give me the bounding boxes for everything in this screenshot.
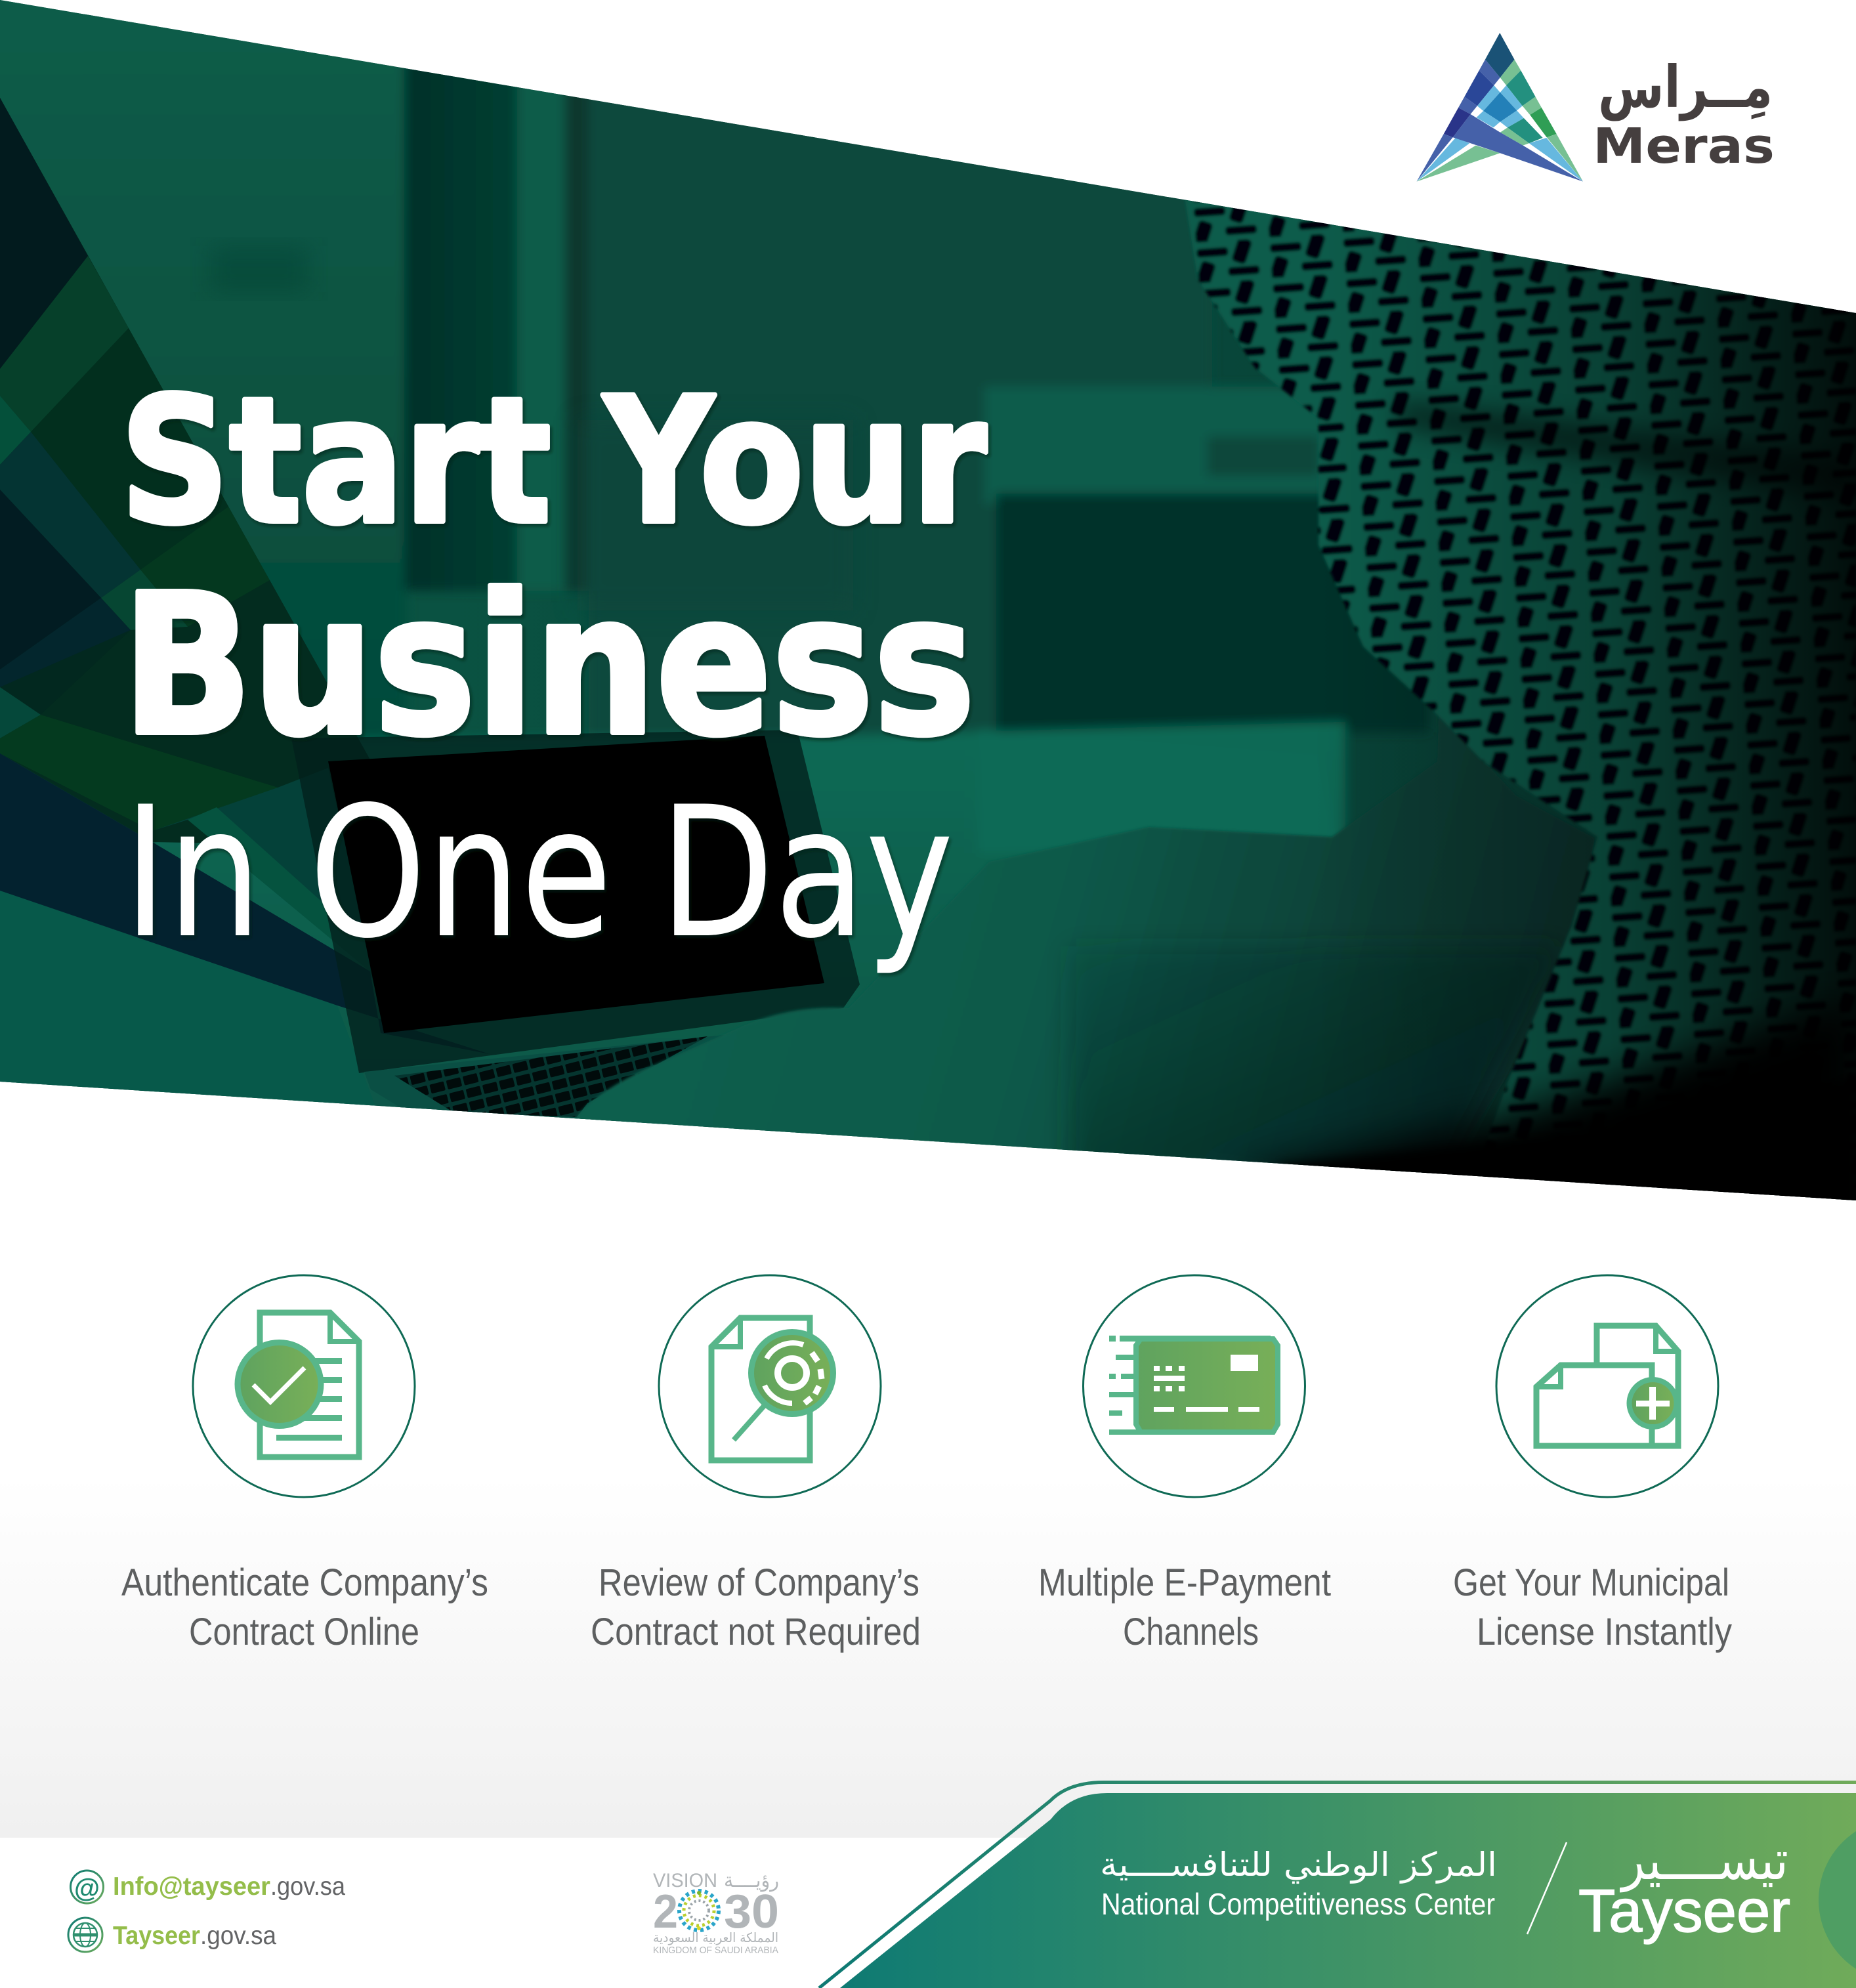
email row: .gov.sa [270, 1872, 345, 1901]
Vision 2030 logo: رؤيــــة [724, 1869, 779, 1892]
icon: documents with plus [1496, 1275, 1718, 1497]
website row: Tayseer [113, 1922, 200, 1950]
keffiyeh headscarf [1185, 197, 1856, 1200]
feature: municipal license [1453, 1275, 1732, 1653]
caption [121, 1561, 488, 1653]
scarf fold shadow [1398, 400, 1856, 499]
headline line 2: Business [122, 553, 975, 778]
logo triangle mark [1417, 33, 1583, 182]
caption: Review of Company’s [599, 1561, 919, 1604]
decorative circle [1819, 1818, 1856, 1982]
caption [1038, 1561, 1331, 1653]
Tayseer Arabic wordmark: تيســــير [1620, 1828, 1788, 1893]
Arabic center name: المركز الوطني للتنافســــية [1100, 1846, 1497, 1884]
faint distant buildings [219, 255, 300, 283]
logo Arabic name: مِــراس [1598, 53, 1773, 121]
feature: review not required [591, 1275, 921, 1653]
laptop screen [328, 736, 824, 1033]
footer contact details [68, 1871, 345, 1952]
Vision 2030 logo: KINGDOM OF SAUDI ARABIA [653, 1945, 778, 1956]
bottom right shadow [1247, 998, 1856, 1247]
Vision 2030 logo: المملكة العربية السعودية [653, 1930, 778, 1945]
grey fade background [0, 1477, 1856, 1838]
English center name: National Competitiveness Center [1101, 1887, 1495, 1921]
shirt cuff [1065, 952, 1508, 1174]
icon: payment card [1083, 1275, 1305, 1497]
laptop [291, 730, 860, 1142]
caption [1453, 1561, 1732, 1653]
Vision 2030 logo: 2 [653, 1886, 678, 1938]
Vision 2030 logo [653, 1869, 779, 1956]
icon: document with check [193, 1275, 415, 1497]
geometric overlay shapes [0, 98, 490, 1155]
website row [68, 1918, 276, 1952]
Vision 2030 logo: VISION [653, 1870, 717, 1892]
email row: Info@tayseer [113, 1872, 270, 1901]
black corner wedge [1280, 1076, 1856, 1247]
caption: Get Your Municipal [1453, 1561, 1729, 1604]
headline [120, 361, 988, 978]
headline line 1: Start Your [120, 361, 988, 562]
headline line 3: In One Day [123, 768, 954, 978]
feature: authenticate contract [121, 1275, 488, 1653]
Tayseer footer panel [819, 1783, 1856, 1988]
feature: e-payment [1038, 1275, 1331, 1653]
arm sleeve [576, 819, 1585, 1174]
laptop frame [291, 730, 860, 1073]
divider slash [1527, 1842, 1567, 1934]
hero photo banner [0, 0, 1856, 1247]
right dark vignette [1313, 197, 1856, 1247]
Meras logo [1417, 33, 1775, 182]
caption: Authenticate Company’s [121, 1561, 488, 1604]
laptop keyboard [394, 1036, 707, 1117]
blurred office background [0, 0, 1429, 1155]
icon: document with magnifier [659, 1275, 881, 1497]
caption: Channels [1123, 1611, 1259, 1653]
Tayseer Latin wordmark: Tayseer [1578, 1878, 1790, 1945]
caption: Contract not Required [591, 1611, 921, 1653]
outline stroke [819, 1783, 1856, 1988]
website row: .gov.sa [200, 1922, 276, 1950]
dotted backdrop on window [578, 420, 853, 610]
laptop base [364, 1036, 719, 1121]
caption: Contract Online [189, 1611, 419, 1653]
vision dotted emblem [679, 1891, 719, 1930]
caption: License Instantly [1477, 1611, 1732, 1653]
Vision 2030 logo: 30 [724, 1886, 779, 1938]
caption [591, 1561, 921, 1653]
caption: Multiple E-Payment [1038, 1561, 1331, 1604]
panel fill [840, 1793, 1856, 1988]
email row: @ [74, 1874, 100, 1903]
logo Latin name: Meras [1593, 118, 1775, 175]
email row [71, 1871, 345, 1903]
